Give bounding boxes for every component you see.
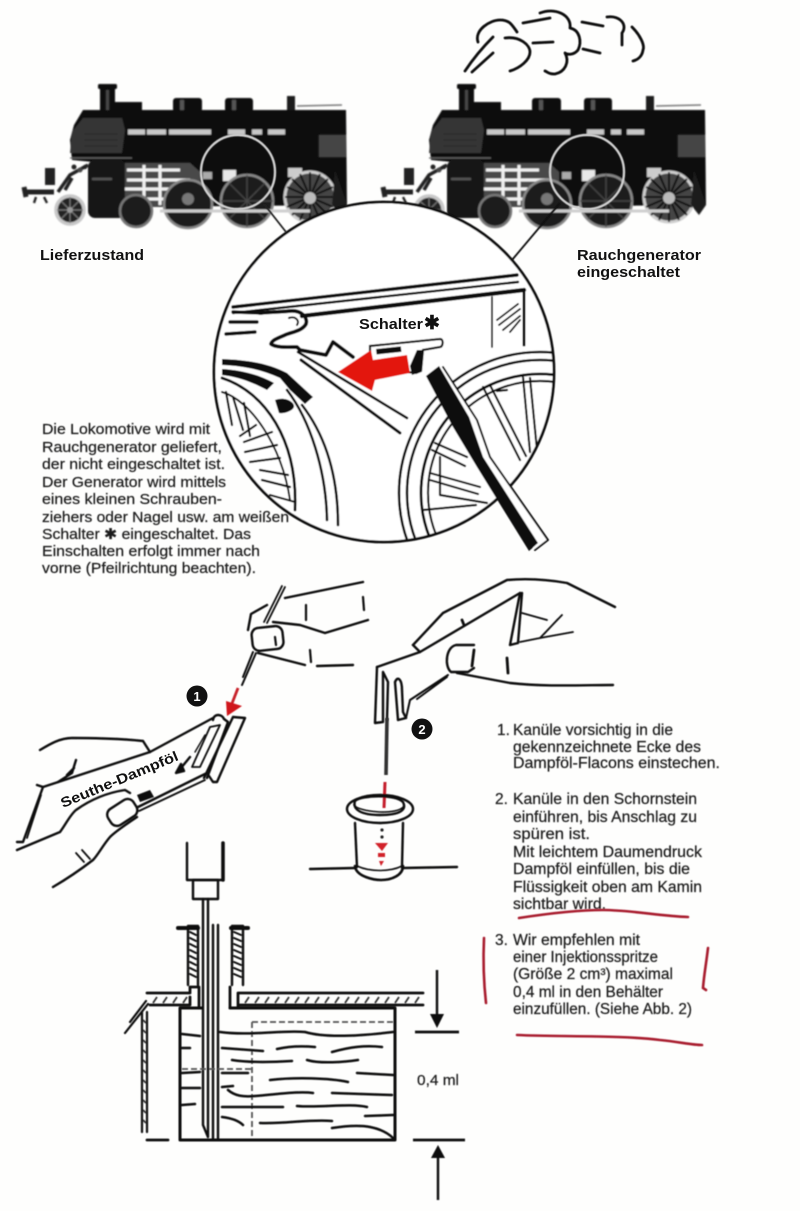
label: Lieferzustand: Lieferzustand <box>40 247 144 264</box>
badge 1: 1 <box>193 689 201 704</box>
syringe tip <box>187 843 223 1140</box>
text block: numbered instructions: Dampföl-Flacons einstechen. <box>513 755 720 772</box>
illustration: needle and chimney with red flow <box>310 718 457 880</box>
screwdriver <box>426 366 548 551</box>
left wheel arcs <box>222 378 338 525</box>
smoke puffs <box>465 11 643 74</box>
illustration: hand squeezing flacon <box>375 579 615 723</box>
text block: numbered instructions: Flüssigkeit oben am Kamin <box>513 879 702 896</box>
label: Schalter: ✱ <box>424 313 440 334</box>
frame rails <box>226 275 524 347</box>
text block: numbered instructions: einführen, bis Anschlag zu <box>513 809 697 826</box>
liquid lines <box>182 1032 393 1138</box>
left wheel band <box>222 359 313 404</box>
label: Schalter: Schalter <box>359 317 423 333</box>
badge 2 <box>412 718 432 740</box>
text block: numbered instructions: (Größe 2 cm³) maximal <box>513 966 673 983</box>
red hand-drawn markings <box>484 910 708 1045</box>
flacon label: Seuthe-Dampföl: Seuthe-Dampföl <box>58 748 181 811</box>
label: Rauchgenerator eingeschaltet: eingeschaltet <box>577 264 680 281</box>
label: Rauchgenerator eingeschaltet <box>577 247 701 281</box>
text block: numbered instructions: Wir empfehlen mit <box>513 932 641 949</box>
label: Schalter <box>359 313 440 334</box>
left wheel spokes <box>226 392 295 502</box>
badge 2: 2 <box>418 722 426 737</box>
text block: numbered instructions <box>495 722 720 1018</box>
dashed container outline <box>182 1022 393 1137</box>
measurement: 0,4 ml with arrows: 0,4 ml <box>417 1072 459 1089</box>
text block: numbered instructions: Kanüle in den Schornstein <box>513 791 697 808</box>
red arrow: piercing direction <box>226 688 242 716</box>
text block: numbered instructions: 3. <box>495 932 508 949</box>
badge 1 <box>186 686 208 706</box>
text block: numbered instructions: 2. <box>495 791 508 808</box>
coupling hook <box>260 311 353 357</box>
text block: introduction: ziehers oder Nagel usw. am weißen <box>42 509 289 526</box>
locomotive: smoke generator on <box>383 84 706 228</box>
switch <box>370 339 443 373</box>
text block: introduction: Der Generator wird mittels <box>42 474 226 491</box>
cross-section diagram: smoke generator <box>125 843 423 1140</box>
measurement: 0,4 ml with arrows <box>413 970 465 1200</box>
text block: introduction: vorne (Pfeilrichtung beachten). <box>42 560 256 577</box>
chimney collar <box>178 926 248 985</box>
diagonal struts <box>298 352 407 418</box>
lens circles and connector lines <box>201 135 624 260</box>
right wheel rims <box>397 350 554 540</box>
locomotive: delivery state <box>24 84 347 228</box>
text block: introduction: der nicht eingeschaltet ist. <box>42 456 225 473</box>
text block: introduction: eines kleinen Schrauben- <box>42 491 222 508</box>
text block: introduction: Rauchgenerator geliefert, <box>42 439 222 456</box>
text block: numbered instructions: einer Injektionsspritze <box>513 949 658 966</box>
text block: numbered instructions: 1. <box>497 722 510 739</box>
text block: numbered instructions: gekennzeichnete Ecke des <box>513 739 701 756</box>
text block: numbered instructions: sichtbar wird. <box>513 896 606 913</box>
text block: introduction: Die Lokomotive wird mit <box>42 421 211 438</box>
text block: numbered instructions: einzufüllen. (Siehe Abb. 2) <box>513 1001 692 1018</box>
text block: numbered instructions: spüren ist. <box>513 826 590 843</box>
text block: numbered instructions: Dampföl einfüllen, bis die <box>513 861 690 878</box>
text block: introduction: Schalter ✱ eingeschaltet. Das <box>42 526 251 543</box>
text block: numbered instructions: 0,4 ml in den Behälter <box>513 984 663 1001</box>
label: Rauchgenerator eingeschaltet: Rauchgenerator <box>577 247 701 264</box>
text block: numbered instructions: Mit leichtem Daumendruck <box>513 844 702 861</box>
illustration: flacon held in hand <box>17 715 245 887</box>
illustration: hand with cannula <box>242 582 368 685</box>
red arrow <box>338 350 410 391</box>
right wheel spokes <box>423 377 537 510</box>
roof plate <box>125 987 423 1140</box>
text block: introduction <box>42 421 289 577</box>
magnified circle: switch detail <box>212 200 556 552</box>
text block: introduction: Einschalten erfolgt immer nach <box>42 543 260 560</box>
text block: numbered instructions: Kanüle vorsichtig in die <box>513 722 673 739</box>
